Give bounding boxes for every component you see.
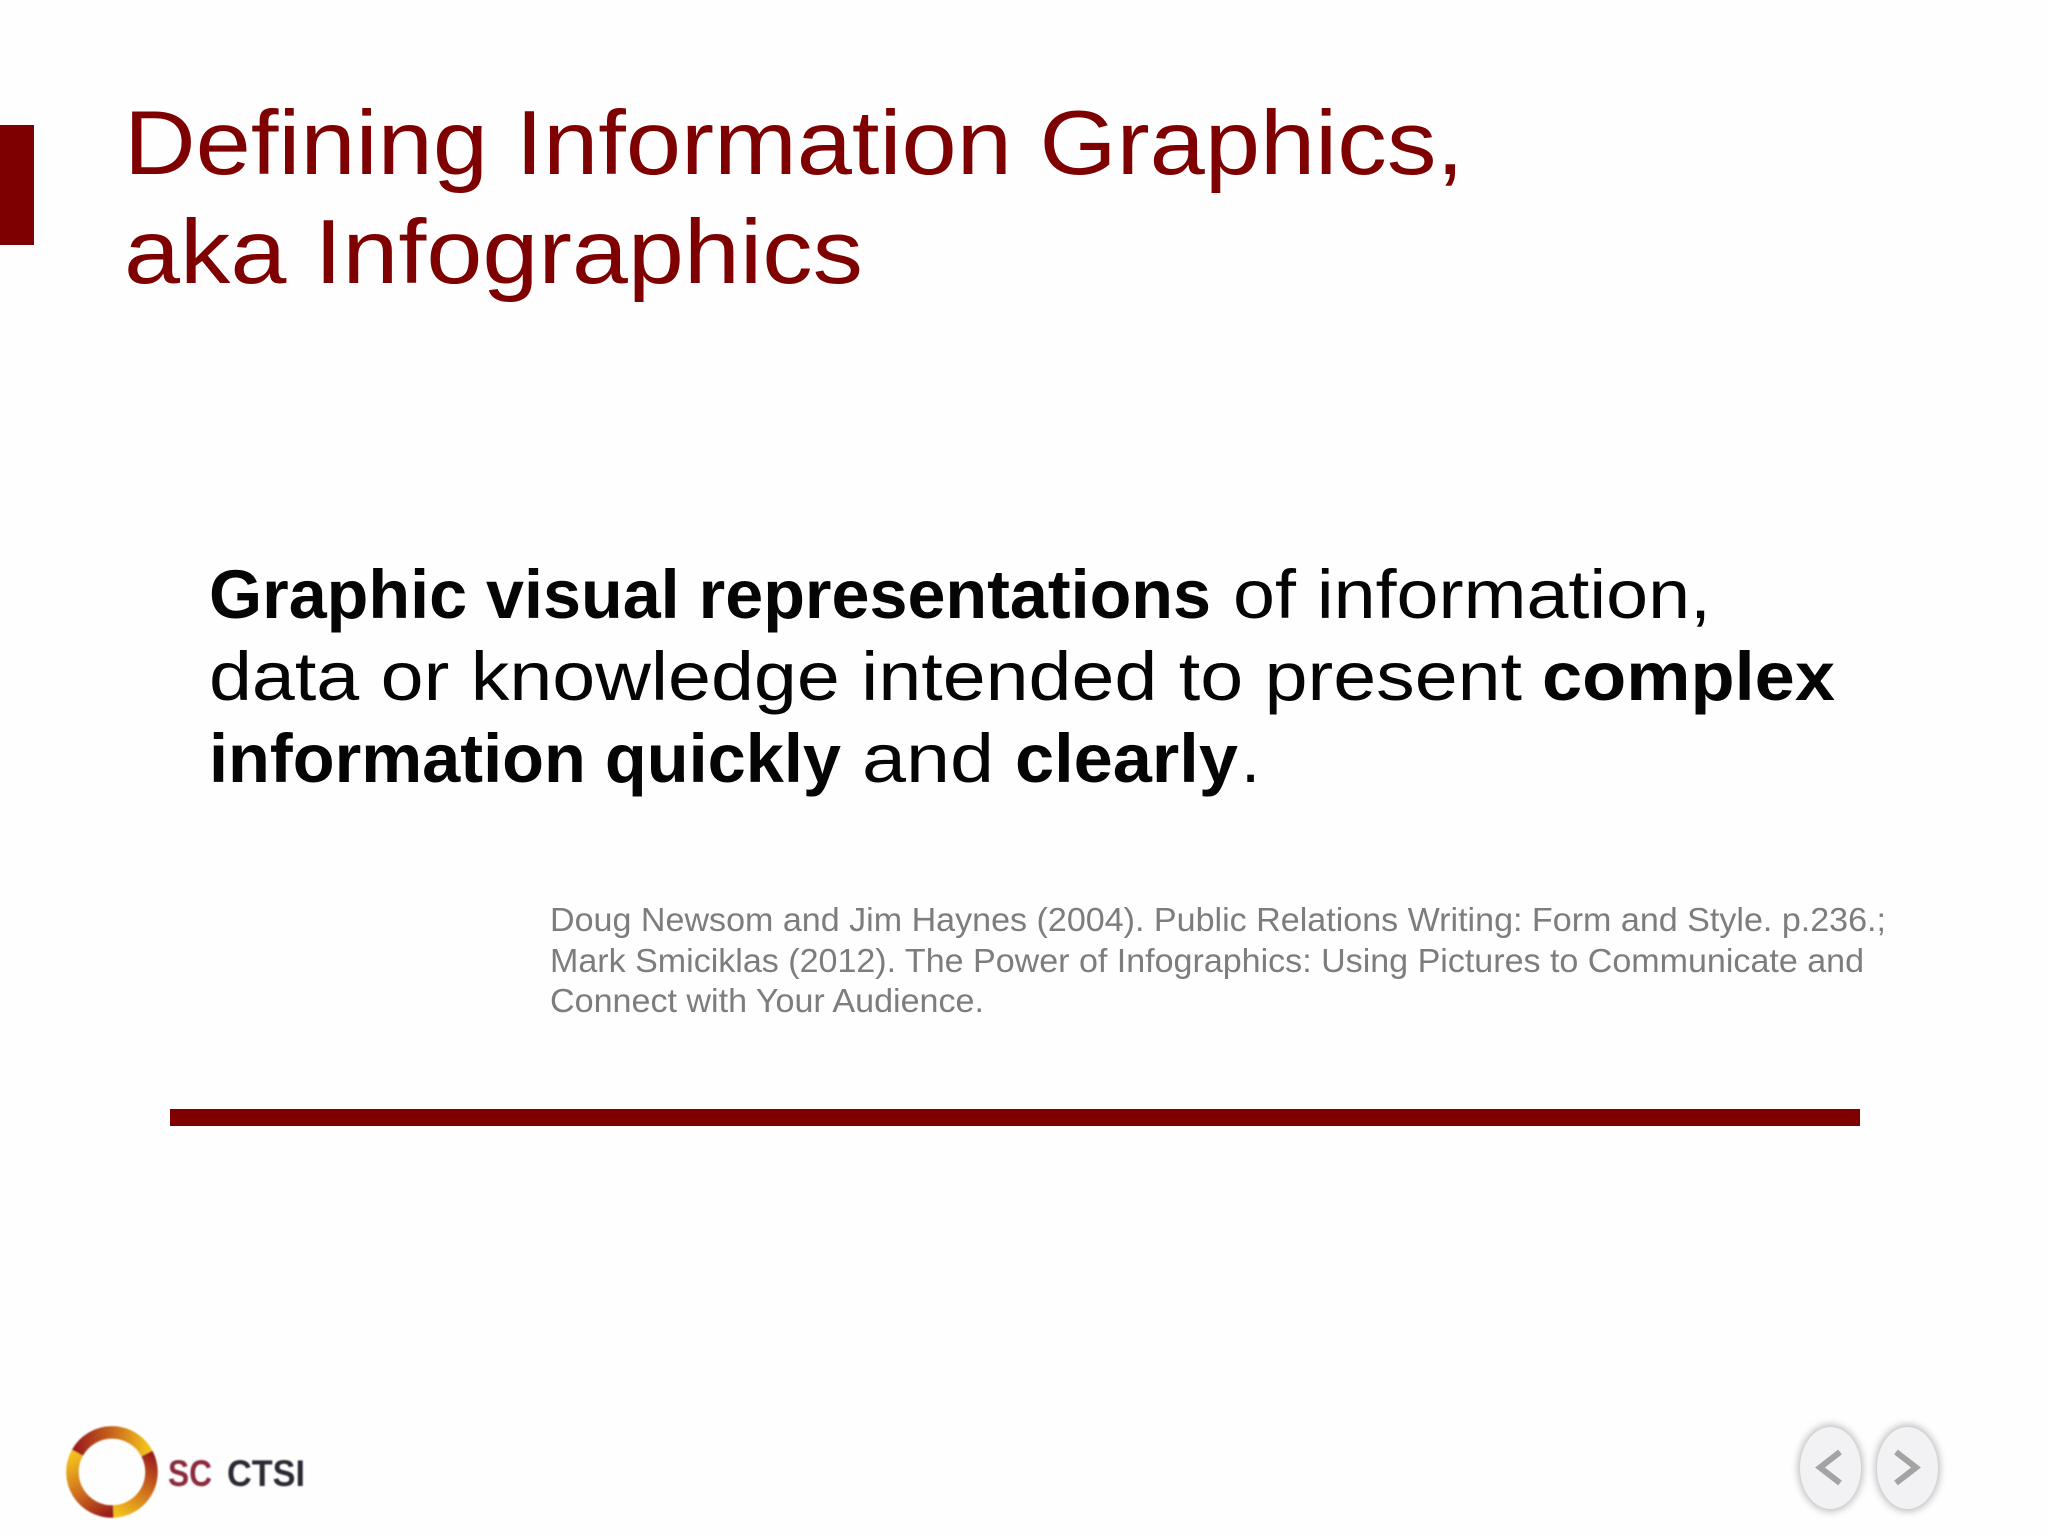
icon: next arrow button bbox=[1874, 1424, 1940, 1512]
definition text: information quickly bbox=[209, 720, 841, 797]
citation: Connect with Your Audience. bbox=[550, 983, 984, 1020]
navigation buttons bbox=[1798, 1424, 1940, 1512]
title: aka Infographics bbox=[124, 202, 863, 303]
icon: logo ring bbox=[72, 1432, 152, 1512]
logo wordmark: CTSI bbox=[227, 1453, 305, 1494]
citation: Doug Newsom and Jim Haynes (2004). Public Relations Writing: Form and Style. p.236.; bbox=[550, 902, 1886, 939]
definition text bbox=[209, 556, 1835, 797]
divider rule bbox=[170, 1109, 1860, 1126]
definition text: and bbox=[862, 720, 994, 797]
accent bar bbox=[0, 125, 34, 245]
definition text: . bbox=[1241, 720, 1260, 797]
definition text: data or knowledge intended to present bbox=[209, 638, 1522, 715]
title: Defining Information Graphics, bbox=[124, 93, 1464, 194]
logo: SC CTSI bbox=[72, 1432, 305, 1512]
definition text: Graphic visual representations bbox=[209, 556, 1211, 633]
title bbox=[124, 93, 1464, 303]
definition text: of information, bbox=[1233, 556, 1711, 633]
icon: previous arrow button bbox=[1798, 1424, 1864, 1512]
citation bbox=[550, 902, 1886, 1020]
definition text: complex bbox=[1542, 638, 1835, 715]
logo wordmark: SC bbox=[168, 1453, 212, 1494]
definition text: clearly bbox=[1015, 720, 1238, 797]
citation: Mark Smiciklas (2012). The Power of Infographics: Using Pictures to Communicate and bbox=[550, 943, 1864, 980]
logo wordmark bbox=[168, 1453, 305, 1494]
